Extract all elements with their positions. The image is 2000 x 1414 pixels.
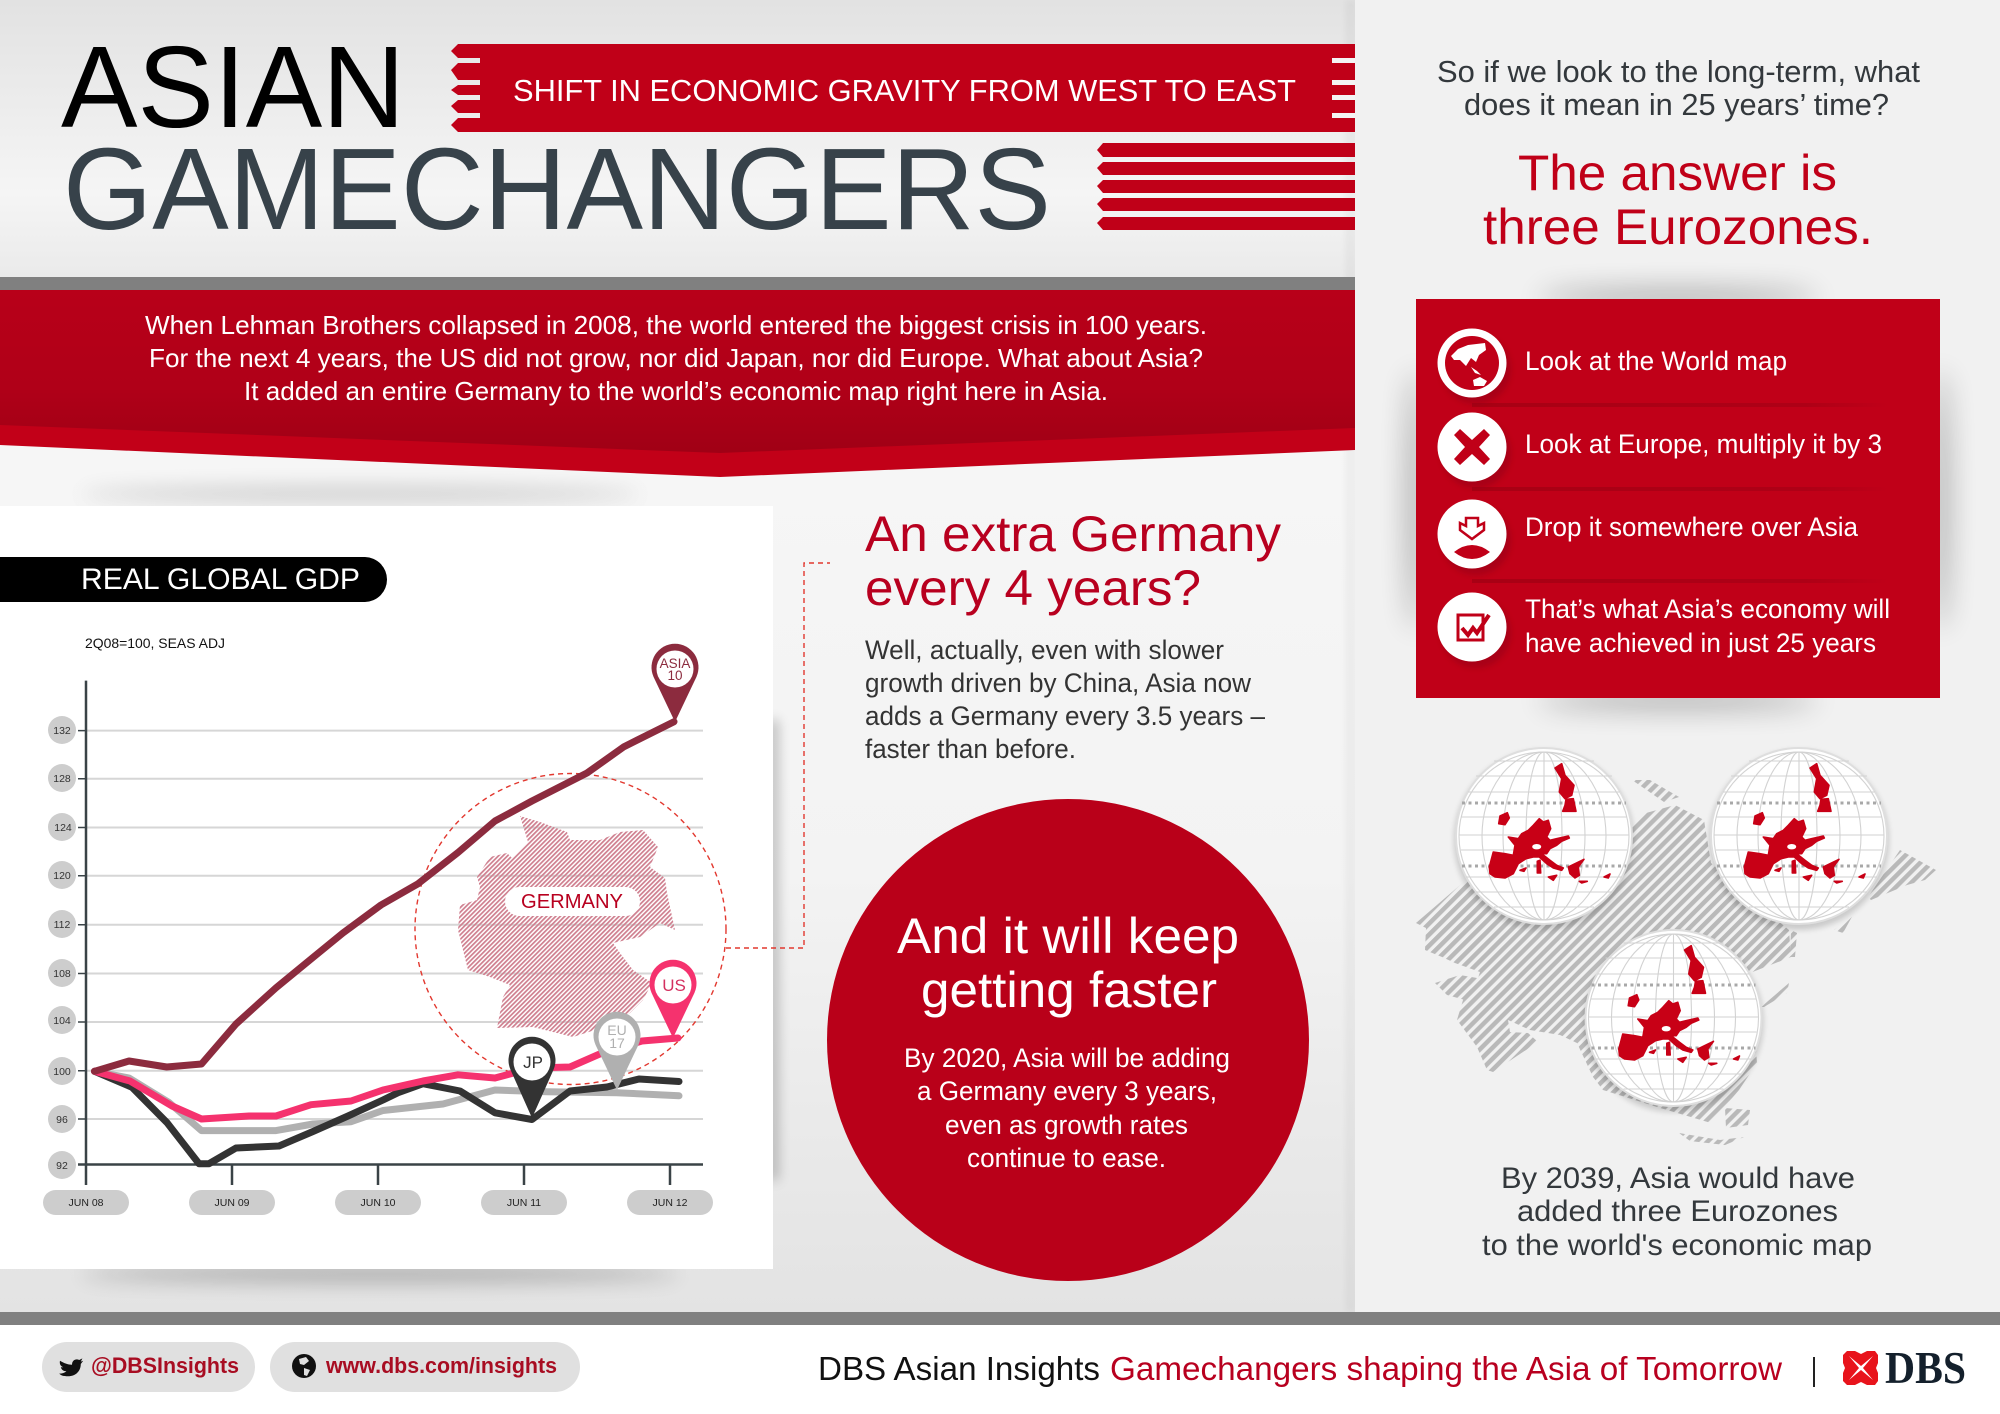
dashed connector from germany to heading	[726, 563, 830, 948]
heading: an extra germany: every 4 years?	[865, 560, 1201, 616]
y axis labels: 132	[53, 725, 71, 737]
text block: by 2039: By 2039, Asia would have	[1501, 1162, 1855, 1195]
text block: germany explanation: growth driven by China, Asia now	[865, 668, 1252, 698]
y axis labels: 92	[56, 1160, 68, 1172]
y axis labels: 120	[53, 870, 71, 882]
step rules	[1472, 403, 1888, 583]
callout body: even as growth rates	[945, 1110, 1188, 1140]
pin: Asia 10: 10	[667, 668, 683, 683]
ribbon banner: subtitle	[451, 44, 1355, 132]
text block: by 2039: to the world's economic map	[1482, 1229, 1872, 1262]
globe: eurozone two	[1709, 748, 1889, 930]
text block: long-term question	[1437, 54, 1920, 122]
footer strapline: Gamechangers shaping the Asia of Tomorrow	[1110, 1350, 1782, 1387]
y axis labels: 104	[53, 1015, 71, 1027]
x axis labels: JUN 08	[68, 1197, 104, 1209]
divider bar bottom	[0, 1312, 2000, 1325]
chart heading pill	[0, 557, 387, 602]
footer strapline: DBS Asian Insights	[818, 1350, 1100, 1387]
step text: achieved: have achieved in just 25 years	[1525, 628, 1876, 658]
red box shadows	[1410, 292, 1946, 706]
x axis labels	[43, 1190, 713, 1215]
icon: chart check	[1438, 592, 1511, 668]
text block: by 2039: added three Eurozones	[1517, 1195, 1838, 1228]
title line: GAMECHANGERS: GAMECHANGERS	[63, 124, 1051, 254]
shadow under red band	[80, 487, 640, 501]
callout heading: And it will keep	[897, 908, 1239, 964]
globe: eurozone three	[1584, 930, 1764, 1112]
text block: germany explanation: adds a Germany every 3.5 years –	[865, 701, 1265, 731]
callout body: continue to ease.	[967, 1143, 1166, 1173]
heading: an extra germany: An extra Germany	[865, 506, 1281, 562]
callout body	[904, 1043, 1230, 1173]
pin: Japan: JP	[523, 1053, 543, 1072]
panel: chart shadows	[80, 720, 778, 1281]
callout heading: getting faster	[921, 962, 1217, 1018]
line: EU17	[94, 1071, 679, 1131]
line: US	[94, 1038, 678, 1119]
y axis labels: 128	[53, 773, 71, 785]
step text: achieved: That’s what Asia’s economy will	[1525, 594, 1890, 624]
pin: Asia 10	[652, 644, 698, 722]
DBS logo: DBS	[1885, 1342, 1966, 1393]
axes	[78, 681, 703, 1185]
title line: ASIAN: ASIAN	[61, 22, 405, 152]
line: Japan	[94, 1071, 679, 1164]
text block: long-term question: So if we look to the long-term, what	[1437, 54, 1920, 89]
heading: the answer: three Eurozones.	[1483, 199, 1873, 255]
chart heading pill: REAL GLOBAL GDP	[81, 563, 360, 596]
panel: three steps	[1416, 299, 1940, 698]
germany label	[505, 887, 640, 916]
asia hatched map	[1416, 780, 1936, 1145]
pin: US	[650, 960, 696, 1038]
icon: twitter bird	[59, 1358, 83, 1376]
intro text: It added an entire Germany to the world’s economic map right here in Asia.	[244, 376, 1108, 406]
footer divider	[1813, 1357, 1815, 1387]
subtitle text: SHIFT IN ECONOMIC GRAVITY FROM WEST TO EAST	[513, 73, 1296, 108]
twitter pill	[42, 1342, 255, 1392]
icon: cross	[1438, 412, 1511, 488]
globe: eurozone one	[1454, 748, 1634, 930]
divider bar top	[0, 277, 1355, 291]
intro text: For the next 4 years, the US did not grow, nor did Japan, nor did Europe. What about Asia?	[149, 343, 1203, 373]
heading: the answer	[1483, 145, 1873, 255]
heading: the answer: The answer is	[1518, 145, 1837, 201]
pin: EU 17: 17	[609, 1035, 625, 1051]
panel: right column background	[1345, 0, 2000, 1312]
step text: world map: Look at the World map	[1525, 346, 1787, 376]
intro text	[145, 310, 1207, 406]
y axis labels: 108	[53, 968, 71, 980]
pin: US: US	[662, 976, 686, 995]
germany hatched map	[458, 816, 675, 1037]
x axis labels: JUN 10	[360, 1197, 396, 1209]
title	[61, 22, 1051, 254]
grid lines	[86, 731, 703, 1119]
DBS logo	[1843, 1342, 1966, 1393]
panel: GDP chart	[0, 506, 773, 1269]
y axis labels: 96	[56, 1114, 68, 1126]
x axis labels: JUN 11	[507, 1197, 541, 1209]
website address: www.dbs.com/insights	[325, 1353, 557, 1378]
pin: EU 17: EU	[607, 1022, 627, 1038]
pin: EU 17	[594, 1012, 640, 1090]
page background: left column	[0, 0, 1355, 1312]
chart unit note: 2Q08=100, SEAS ADJ	[85, 635, 225, 651]
footer strapline	[818, 1350, 1782, 1387]
icon: drop arrow	[1438, 500, 1511, 575]
intro text: When Lehman Brothers collapsed in 2008, the world entered the biggest crisis in 100 years.	[145, 310, 1207, 340]
callout body: By 2020, Asia will be adding	[904, 1043, 1230, 1073]
twitter handle: @DBSInsights	[91, 1353, 239, 1378]
heading: an extra germany	[865, 506, 1281, 616]
pin: Asia 10: ASIA	[660, 656, 690, 671]
text block: by 2039	[1482, 1162, 1872, 1262]
text block: germany explanation	[865, 635, 1265, 764]
step text: achieved	[1525, 594, 1890, 658]
x axis labels: JUN 09	[214, 1197, 250, 1209]
y axis labels: 124	[54, 822, 72, 834]
germany label: GERMANY	[521, 891, 623, 913]
callout body: a Germany every 3 years,	[917, 1076, 1217, 1106]
website pill	[270, 1342, 580, 1392]
step text: multiply: Look at Europe, multiply it by 3	[1525, 429, 1882, 459]
text block: germany explanation: Well, actually, even with slower	[865, 635, 1224, 665]
dashed germany circle	[415, 774, 726, 1084]
icon: world globe	[1438, 328, 1511, 404]
footer	[0, 1325, 2000, 1414]
text block: germany explanation: faster than before.	[865, 734, 1076, 764]
callout: red circle	[827, 799, 1309, 1281]
x axis labels: JUN 12	[652, 1197, 688, 1209]
red intro band	[0, 290, 1355, 477]
y axis labels	[48, 716, 76, 1179]
pin: Japan	[508, 1037, 556, 1118]
line: Asia 10	[94, 722, 674, 1071]
y axis labels: 100	[53, 1066, 71, 1078]
ribbon stripes beside title	[1097, 143, 1355, 230]
text block: long-term question: does it mean in 25 years’ time?	[1464, 87, 1889, 122]
icon: web globe	[292, 1354, 316, 1378]
step text: drop: Drop it somewhere over Asia	[1525, 512, 1858, 542]
y axis labels: 112	[54, 919, 71, 931]
callout heading	[897, 908, 1239, 1018]
